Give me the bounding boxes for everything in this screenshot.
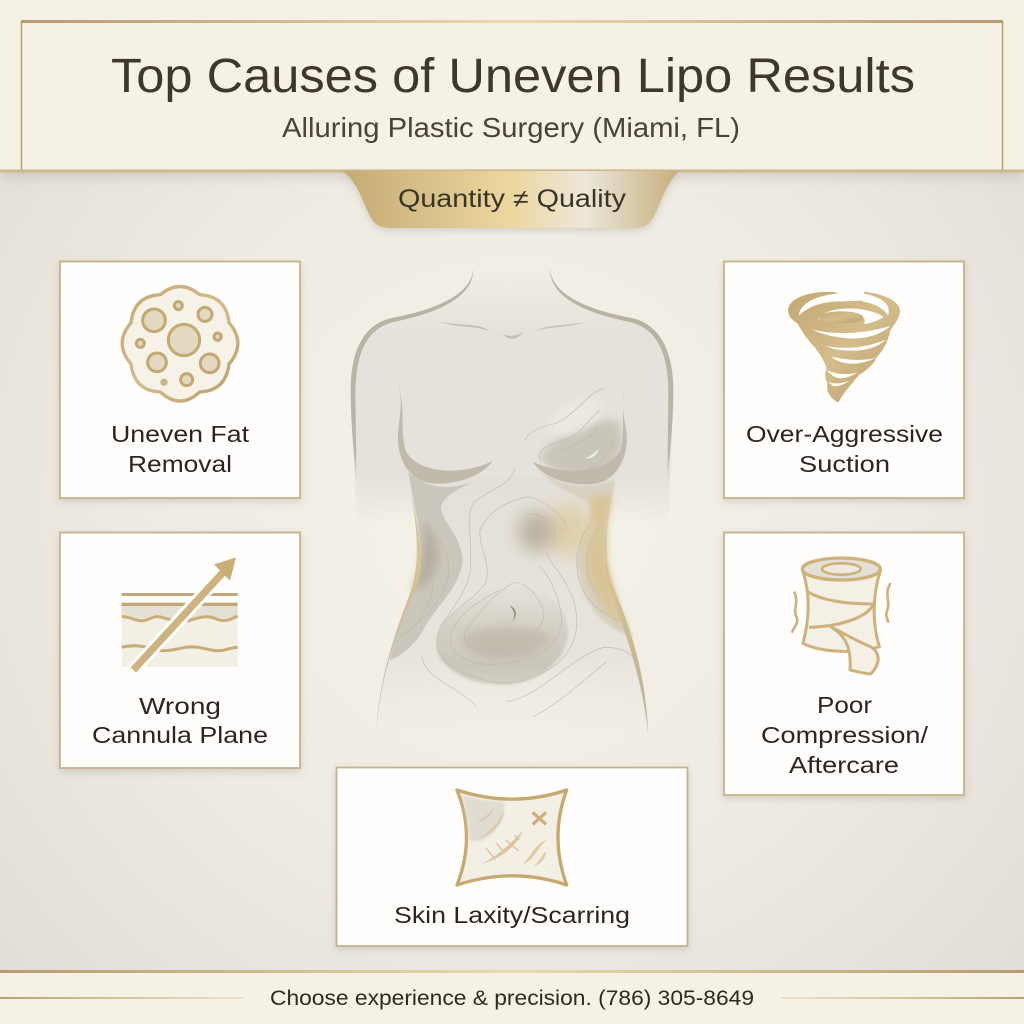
label line 2: Suction xyxy=(799,451,890,477)
gold glow xyxy=(548,503,592,557)
right waist outline xyxy=(605,482,648,735)
header panel xyxy=(0,0,1024,172)
label: Over-Aggressive xyxy=(746,421,943,447)
label: Uneven Fat xyxy=(111,421,250,447)
title: Top Causes of Uneven Lipo Results xyxy=(111,50,915,103)
banner text: Quantity ≠ Quality xyxy=(398,185,627,213)
card: wrong cannula plane xyxy=(60,532,300,768)
icon: skin patch with scars xyxy=(457,790,567,885)
dark crescent xyxy=(463,627,553,659)
icon: compression bandage xyxy=(792,558,890,674)
icon: fat cells xyxy=(122,286,238,401)
contour lines xyxy=(400,388,633,717)
label: Skin Laxity/Scarring xyxy=(394,902,630,928)
footer text: Choose experience & precision. (786) 305-8649 xyxy=(270,987,754,1010)
left waist deep shade xyxy=(412,520,438,590)
card: skin laxity and scarring xyxy=(336,768,688,946)
right waist gold area xyxy=(586,494,628,630)
collarbone left xyxy=(437,321,490,332)
right waist shading xyxy=(537,465,633,637)
footer bar xyxy=(0,970,1024,1024)
label: Poor xyxy=(817,692,872,718)
collarbone right xyxy=(534,321,588,332)
icon: skin layers and cannula xyxy=(122,557,238,670)
card: poor compression xyxy=(724,532,964,795)
neck and shoulder left xyxy=(351,268,473,487)
card: over-aggressive suction xyxy=(724,262,964,498)
highlight spot xyxy=(584,448,599,459)
label: Wrong xyxy=(139,693,221,719)
label line 2: Removal xyxy=(128,451,232,477)
sternum notch xyxy=(503,332,523,339)
lower abdomen dark ring xyxy=(436,585,568,685)
lower torso xyxy=(377,473,648,736)
left breast crease xyxy=(398,386,493,484)
right breast crease xyxy=(532,386,627,484)
banner: quantity not quality xyxy=(342,171,680,228)
left waist shading xyxy=(390,472,473,660)
right breast shading xyxy=(540,420,622,478)
right breast highlight xyxy=(543,390,607,443)
icon: tornado xyxy=(788,288,900,403)
left waist outline xyxy=(376,482,421,735)
card: uneven fat removal xyxy=(60,262,300,498)
neck and shoulder right xyxy=(550,268,673,487)
upper abdomen dimple xyxy=(517,511,556,552)
label line 2: Compression/ xyxy=(761,722,929,748)
navel xyxy=(510,606,516,621)
subtitle: Alluring Plastic Surgery (Miami, FL) xyxy=(282,112,740,143)
label line 3: Aftercare xyxy=(789,752,899,778)
central torso illustration xyxy=(351,268,673,736)
upper body xyxy=(352,268,673,523)
label line 2: Cannula Plane xyxy=(92,722,268,748)
